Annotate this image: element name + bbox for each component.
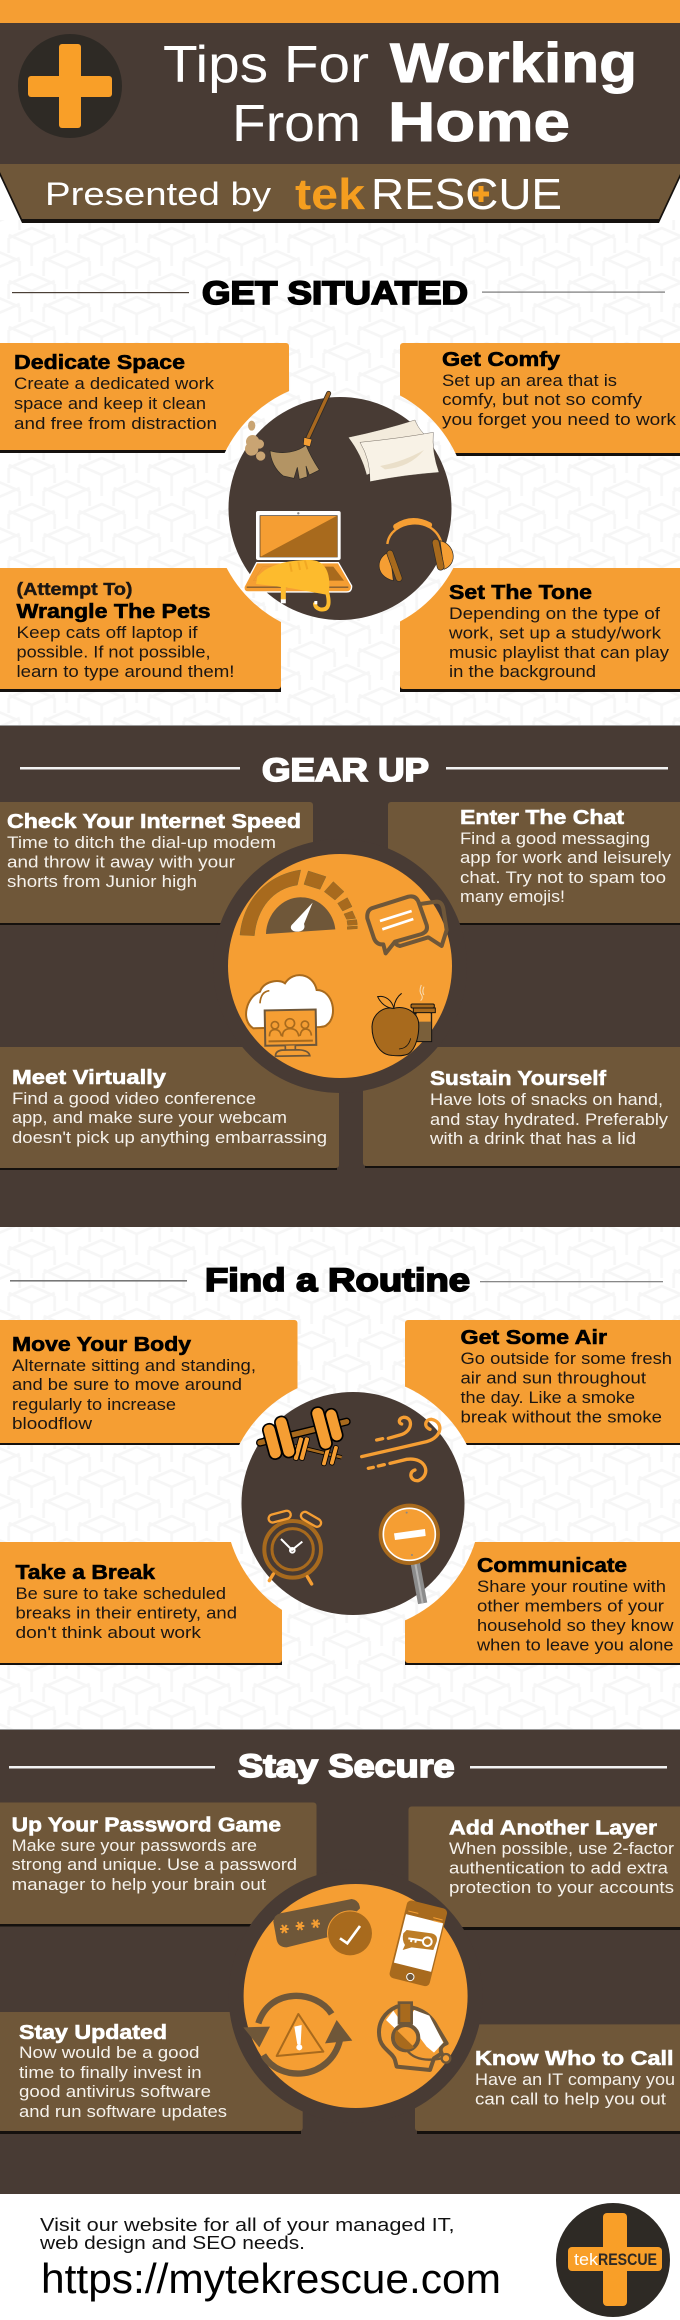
panel: Know Who to Call: Have an IT company you [475,2071,675,2089]
circle: Get Situated icons [212,380,468,636]
title: Tips For [163,36,369,94]
panel: Get Comfy: Get Comfy [442,348,561,371]
circle: Find a Routine icons [225,1376,481,1632]
icon: password check [273,1899,373,1956]
heading: Gear Up: GEAR UP [262,752,429,788]
footer logo: RESCUE [598,2250,657,2269]
panel: Dedicate Space [0,343,289,453]
icon: chat bubbles [367,896,447,953]
heading: Stay Secure: Stay Secure [238,1748,454,1784]
panel: Wrangle The Pets: Keep cats off laptop if [16,624,198,642]
panel: Sustain Yourself [363,1047,680,1168]
panel: Move Your Body: regularly to increase [12,1396,176,1414]
footer logo [556,2203,670,2317]
panel: Check Your Internet Speed: Check Your Internet Speed [7,810,301,833]
panel: Up Your Password Game: Make sure your passwords are [12,1837,257,1855]
heading: Find a Routine: Find a Routine [205,1262,470,1298]
icon: refresh warning [243,1996,352,2074]
presented by ribbon: RESCUE [371,170,562,219]
panel: Get Some Air: break without the smoke [460,1408,662,1426]
presented by ribbon: Presented by [45,176,271,212]
icon: dumbbells [260,1406,347,1466]
panel: Dedicate Space: and free from distraction [14,415,217,433]
panel: Check Your Internet Speed: shorts from Junior high [7,873,197,891]
panel: Wrangle The Pets: Wrangle The Pets [16,600,210,623]
icon: headphones [379,521,453,581]
panel: Set The Tone: Set The Tone [449,581,592,604]
icon: broom and dust [245,393,329,479]
panel: Stay Updated: good antivirus software [19,2083,211,2101]
icon: speedometer [240,870,357,936]
header banner [0,0,680,223]
circle: Gear Up icons [213,839,467,1093]
panel: Add Another Layer [408,1806,680,1930]
panel: Sustain Yourself: with a drink that has a lid [429,1130,636,1148]
panel: Enter The Chat: chat. Try not to spam too [460,869,666,887]
panel: Move Your Body: and be sure to move around [12,1376,242,1394]
logo: orange plus in dark circle [18,34,122,138]
presented by ribbon: tek [295,170,366,219]
panel: Meet Virtually: doesn't pick up anything embarrassing [12,1129,327,1147]
panel: Enter The Chat [388,802,680,925]
footer [0,2194,680,2320]
panel: Dedicate Space: Dedicate Space [14,351,185,374]
panel: Communicate [405,1542,680,1665]
presented by ribbon [0,164,680,223]
panel: Set The Tone: music playlist that can play [449,644,670,662]
panel: Set The Tone: work, set up a study/work [448,624,662,642]
section: Gear Up [0,725,680,1227]
panel: Move Your Body: bloodflow [12,1415,92,1433]
panel: Take a Break: Take a Break [16,1561,156,1584]
heading: Get Situated: GET SITUATED [202,275,468,311]
panel: Set The Tone [400,568,680,692]
panel: Add Another Layer: Add Another Layer [449,1816,657,1840]
icon: alarm clock [264,1510,323,1584]
panel: Add Another Layer: protection to your accounts [449,1879,674,1897]
panel: Get Comfy: comfy, but not so comfy [442,391,643,409]
panel: Get Some Air [405,1320,680,1445]
panel: Get Comfy: Set up an area that is [442,372,617,390]
panel: Meet Virtually: Find a good video conference [12,1090,256,1108]
title: From [232,95,361,153]
icon: apple and coffee cup [372,985,435,1056]
icon: cloud video conference [246,975,333,1056]
panel: Stay Updated: Now would be a good [19,2044,199,2062]
cat [256,560,329,610]
panel: Take a Break: don't think about work [16,1624,202,1642]
panel: Dedicate Space: space and keep it clean [14,395,206,413]
panel: Meet Virtually [0,1047,339,1170]
panel: Communicate: household so they know [477,1617,674,1635]
panel: Set The Tone: in the background [449,663,596,681]
website url: https://mytekrescue.com [41,2255,501,2302]
icon: laptop with cat [244,511,352,610]
panel: Check Your Internet Speed [0,802,313,925]
panel: Stay Updated: time to finally invest in [19,2064,202,2082]
panel: Get Some Air: air and sun throughout [460,1370,646,1388]
panel: Get Some Air: Go outside for some fresh [460,1350,672,1368]
panel: Take a Break [0,1542,282,1665]
panel: Up Your Password Game [0,1802,316,1926]
panel: Dedicate Space: Create a dedicated work [14,375,215,393]
panel: Get Comfy: you forget you need to work [442,411,677,429]
title [163,31,637,153]
panel: Get Some Air: the day. Like a smoke [460,1389,635,1407]
panel: Get Comfy [400,343,680,456]
panel: Get Some Air: Get Some Air [460,1326,607,1349]
panel: Add Another Layer: When possible, use 2-factor [449,1840,675,1858]
panel: Stay Updated: Stay Updated [19,2021,167,2044]
panel: Move Your Body: Move Your Body [12,1333,192,1356]
panel: Up Your Password Game: manager to help your brain out [12,1876,266,1894]
panel: Check Your Internet Speed: Time to ditch the dial-up modem [7,834,276,852]
panel: Wrangle The Pets: (Attempt To) [16,579,132,599]
footer text line 2: web design and SEO needs. [39,2232,305,2253]
panel: Stay Updated: and run software updates [19,2103,227,2121]
panel: Up Your Password Game: strong and unique. Use a password [12,1856,297,1874]
panel: Enter The Chat: app for work and leisurely [460,849,672,867]
title: Home [388,90,570,153]
panel: Set The Tone: Depending on the type of [449,605,660,623]
footer text: Visit our website for all of your managed IT, [40,2214,454,2235]
panel: Wrangle The Pets: possible. If not possible, [16,644,210,662]
icon: wind [362,1417,440,1481]
icon: support headset [379,2003,450,2070]
panel: Enter The Chat: Enter The Chat [460,806,624,829]
panel: Check Your Internet Speed: and throw it away with your [7,854,236,872]
icon: phone with key [389,1900,448,1987]
panel: Meet Virtually: app, and make sure your webcam [12,1109,287,1127]
panel: Take a Break: breaks in their entirety, and [16,1604,237,1622]
panel: Move Your Body: Alternate sitting and standing, [12,1357,256,1375]
panel: Take a Break: Be sure to take scheduled [16,1585,226,1603]
panel: Add Another Layer: authentication to add extra [449,1860,669,1878]
panel: Know Who to Call [415,2024,680,2134]
panel: Meet Virtually: Meet Virtually [12,1066,167,1089]
panel: Up Your Password Game: Up Your Password Game [12,1813,281,1836]
panel: Know Who to Call: Know Who to Call [475,2047,674,2070]
panel: Move Your Body [0,1320,298,1445]
panel: Stay Updated [0,2012,303,2134]
panel: Communicate: when to leave you alone [476,1636,674,1654]
panel: Communicate: other members of your [477,1598,665,1616]
panel: Know Who to Call: can call to help you out [475,2090,666,2108]
panel: Sustain Yourself: and stay hydrated. Preferably [430,1111,669,1129]
icon: stop sign [379,1504,440,1603]
panel: Sustain Yourself: Sustain Yourself [430,1067,606,1090]
panel: Communicate: Communicate [477,1554,627,1577]
panel: Wrangle The Pets [0,568,281,692]
panel: Enter The Chat: Find a good messaging [460,830,650,848]
panel: Enter The Chat: many emojis! [460,888,565,906]
icon: pillows [348,420,439,482]
title: Working [390,31,637,94]
panel: Sustain Yourself: Have lots of snacks on hand, [430,1091,663,1109]
panel: Communicate: Share your routine with [477,1578,666,1596]
circle: Stay Secure icons [229,1869,483,2123]
footer logo: tek [574,2250,599,2269]
panel: Wrangle The Pets: learn to type around them! [16,663,234,681]
section: Stay Secure [0,1729,680,2194]
